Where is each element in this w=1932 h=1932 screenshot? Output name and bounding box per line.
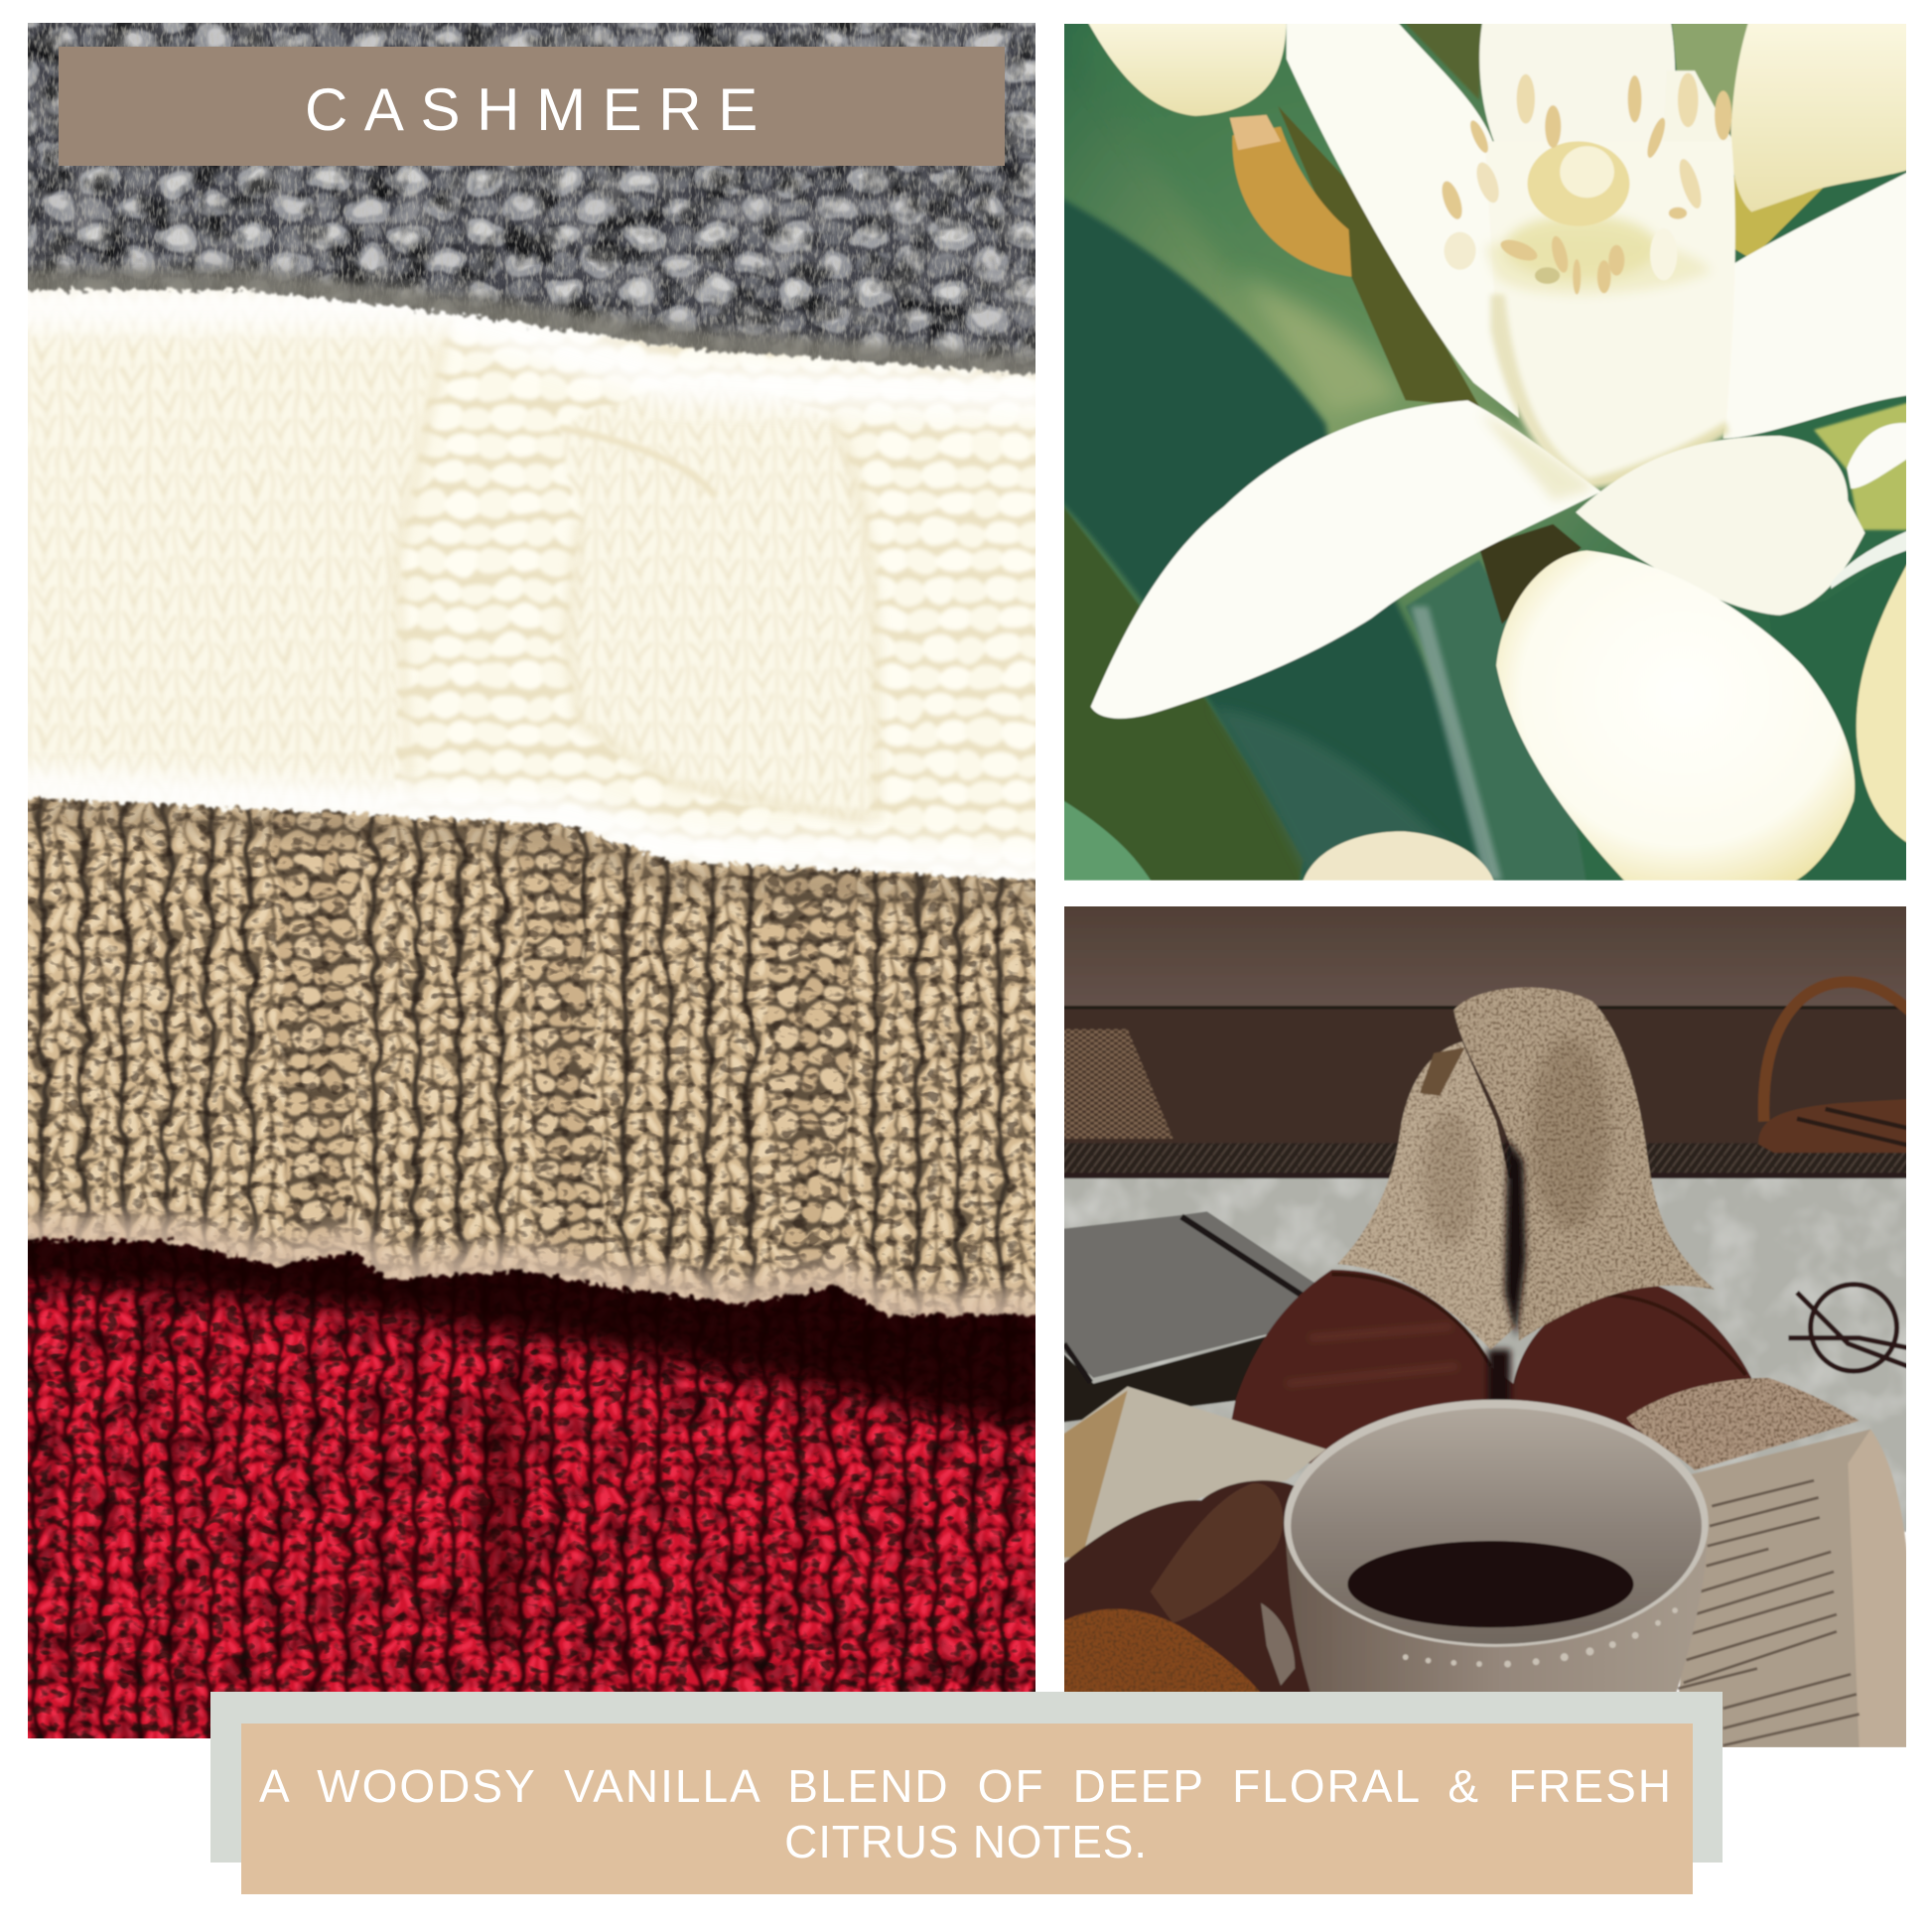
cable stitch bbox=[559, 382, 877, 821]
petal upper left bbox=[1287, 12, 1519, 418]
petal top bbox=[1479, 12, 1676, 153]
backing panel: sage rectangle bbox=[210, 1692, 1723, 1863]
trousers bbox=[1230, 1270, 1751, 1463]
title banner bbox=[59, 47, 1005, 166]
pistil bbox=[1505, 141, 1658, 280]
panel: orange blossom photo bbox=[1064, 24, 1906, 881]
hand bbox=[1053, 1480, 1337, 1754]
tan knit sweater bbox=[28, 794, 1035, 1319]
stem bbox=[1278, 106, 1479, 406]
socks bbox=[1337, 988, 1715, 1349]
crochet blanket bbox=[1627, 1378, 1860, 1470]
petal lower right bbox=[1576, 436, 1865, 616]
leaves background bbox=[1053, 12, 1916, 890]
garter stitch bands bbox=[397, 319, 1052, 903]
mug bead detail bbox=[1403, 1607, 1678, 1667]
petal big left bbox=[1091, 400, 1601, 719]
bud bottom bbox=[1301, 831, 1496, 890]
panel: cozy socks and coffee photo bbox=[1064, 906, 1906, 1747]
bud top right bbox=[1730, 12, 1916, 212]
title text: CASHMERE bbox=[305, 76, 774, 143]
description panel: tan rectangle with text bbox=[241, 1724, 1693, 1894]
bud right edge bbox=[1855, 563, 1906, 844]
notebook bbox=[1053, 1211, 1320, 1424]
right book page bbox=[1672, 1430, 1916, 1754]
panel: cashmere sweater stack photo bbox=[28, 23, 1035, 1738]
stamens bbox=[1438, 73, 1731, 295]
tabletop bbox=[1053, 1178, 1916, 1532]
left book page bbox=[1053, 1387, 1326, 1563]
description text bbox=[259, 1760, 1673, 1867]
description text: A WOODSY VANILLA BLEND OF DEEP FLORAL & FRESH bbox=[259, 1760, 1673, 1812]
coffee bbox=[1347, 1541, 1633, 1627]
coffee mug bbox=[1284, 1400, 1709, 1697]
cream knit sweater bbox=[28, 286, 1035, 882]
red knit sweater bbox=[0, 1221, 1052, 1757]
bud top left bbox=[1087, 24, 1287, 117]
wicker basket bbox=[1053, 1030, 1173, 1139]
sleeve bbox=[1053, 1609, 1264, 1697]
bud large lower bbox=[1496, 551, 1855, 890]
left stockinette panel bbox=[28, 290, 434, 786]
orange bud stalk bbox=[1232, 127, 1351, 277]
grey knit sweater bbox=[28, 23, 1035, 377]
glasses bbox=[1788, 1285, 1916, 1371]
petal right bbox=[1724, 168, 1916, 439]
petal small right bbox=[1847, 423, 1916, 488]
basket handle bbox=[1758, 982, 1916, 1153]
description text: CITRUS NOTES. bbox=[784, 1816, 1148, 1867]
petal centre bbox=[1485, 141, 1735, 484]
wall and bench bbox=[1053, 894, 1916, 1179]
